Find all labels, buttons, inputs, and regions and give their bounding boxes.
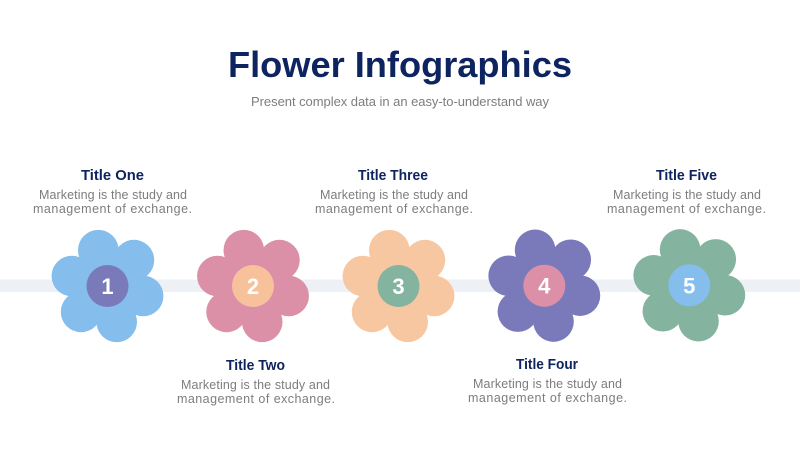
text block: title five: Title Five (656, 167, 717, 184)
text block: title one (33, 167, 192, 216)
flower 1 (52, 230, 163, 342)
flower 4 (488, 230, 600, 342)
text block: title four: Title Four (516, 356, 578, 373)
flower 4: 4 (538, 274, 551, 299)
flower 3 (343, 230, 454, 342)
text block: title four: management of exchange. (468, 391, 627, 405)
text block: title one: management of exchange. (33, 202, 192, 216)
text block: title three: management of exchange. (315, 202, 473, 216)
flower 2 (197, 230, 309, 342)
title: Flower Infographics (228, 44, 572, 85)
background band (0, 280, 800, 292)
text block: title four: Marketing is the study and (473, 377, 622, 391)
text block: title two: Marketing is the study and (181, 378, 330, 392)
text block: title two: management of exchange. (177, 392, 335, 406)
text block: title three: Title Three (358, 167, 428, 184)
text block: title one: Title One (81, 167, 144, 184)
subtitle: Present complex data in an easy-to-understand way (251, 94, 550, 109)
flower 3: 3 (392, 274, 405, 299)
text block: title five: Marketing is the study and (613, 188, 761, 202)
flower 5 (633, 229, 745, 341)
flower 2: 2 (247, 274, 259, 299)
text block: title two (177, 357, 335, 406)
text block: title three: Marketing is the study and (320, 188, 468, 202)
text block: title five: management of exchange. (607, 202, 766, 216)
text block: title five (607, 167, 766, 216)
text block: title three (315, 167, 473, 216)
flower 1: 1 (101, 274, 114, 299)
flower 5: 5 (683, 273, 695, 298)
text block: title one: Marketing is the study and (39, 188, 187, 202)
text block: title two: Title Two (226, 357, 285, 374)
text block: title four (468, 356, 627, 405)
